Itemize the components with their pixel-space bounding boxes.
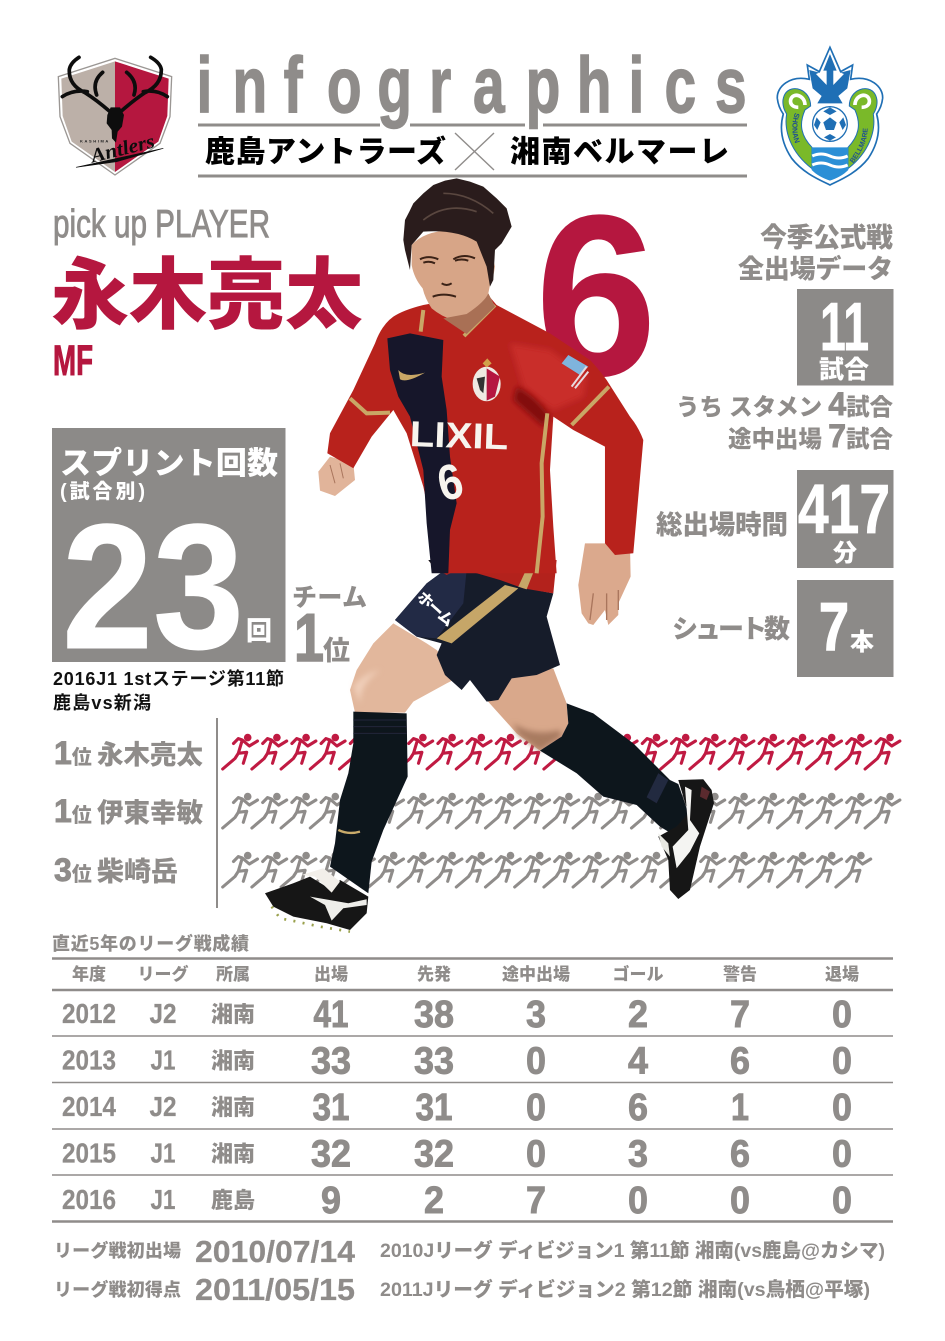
table header: 退場 xyxy=(825,965,859,984)
panel: sprint count: (試合別) xyxy=(60,480,145,503)
row 2012: J2 xyxy=(150,998,176,1029)
sleeve patch xyxy=(562,355,588,375)
squad number: 6 xyxy=(535,167,657,424)
table header: 途中出場 xyxy=(502,964,570,984)
first league appearance: 2010Jリーグ ディビジョン1 第11節 湘南(vs鹿島@カシマ) xyxy=(380,1239,885,1262)
ranking labels: 1位 xyxy=(54,735,92,771)
row 2014 xyxy=(62,1087,852,1129)
row 2014: 湘南 xyxy=(211,1095,255,1120)
trident xyxy=(809,54,851,103)
panel: sprint count: スプリント回数 xyxy=(60,446,278,481)
right hand xyxy=(578,543,631,625)
shorts xyxy=(395,565,560,702)
row 2015: J1 xyxy=(150,1138,176,1168)
ranking labels: 3位 xyxy=(54,852,92,888)
heading: season appearances data xyxy=(738,222,893,284)
jersey black panel xyxy=(387,333,457,573)
back sock xyxy=(540,703,688,837)
stat box: 11 matches: 試合 xyxy=(819,356,869,384)
row 2013: 湘南 xyxy=(211,1048,255,1074)
ranking labels: 永木亮太 xyxy=(97,740,203,770)
team rank: チーム xyxy=(292,584,367,612)
text: starts and substitute appearances: 途中出場 7試合 xyxy=(728,418,894,454)
ranking labels: 1位 xyxy=(54,793,92,829)
table heading: 直近5年のリーグ戦成績 xyxy=(52,933,249,954)
big number 23: 23 xyxy=(62,487,244,686)
stat: shots: シュート数 xyxy=(672,614,790,644)
pictogram row: 柴崎岳 sprints xyxy=(223,852,871,887)
row 2015: 2015 xyxy=(62,1138,116,1168)
row 2014: 6 xyxy=(628,1087,648,1129)
row 2014: 2014 xyxy=(62,1091,116,1122)
first league appearance xyxy=(54,1234,885,1269)
team rank xyxy=(292,584,367,676)
row 2015: 0 xyxy=(526,1134,546,1176)
ranking labels: 伊東幸敏 xyxy=(97,798,203,828)
row 2013: J1 xyxy=(150,1044,176,1076)
row 2013: 0 xyxy=(832,1040,852,1082)
row 2013: 0 xyxy=(526,1040,546,1082)
crest: Shonan Bellmare xyxy=(776,45,884,186)
back boot xyxy=(658,779,714,899)
table header: ゴール xyxy=(612,964,664,984)
jersey gold stripes xyxy=(350,305,609,573)
shorts text: ホーム xyxy=(413,589,457,630)
stat box: 417 minutes: 分 xyxy=(833,540,857,567)
title: infographics: infographics xyxy=(197,41,747,129)
jersey xyxy=(327,293,643,573)
text: BELLMARE: BELLMARE xyxy=(850,128,868,163)
stat box: 11 matches: 11 xyxy=(820,289,869,365)
football xyxy=(813,107,847,141)
table header: 先発 xyxy=(417,964,451,984)
neck and face xyxy=(412,230,495,334)
stat box: 417 minutes: 417 xyxy=(798,470,890,548)
row 2013: 2013 xyxy=(62,1044,116,1076)
ranking labels: 柴崎岳 xyxy=(97,857,178,887)
ranking axis xyxy=(216,718,218,908)
player legs xyxy=(265,543,714,932)
row 2014: 0 xyxy=(832,1087,852,1129)
first league goal xyxy=(54,1272,870,1307)
row 2014: J2 xyxy=(150,1091,176,1122)
row 2012: 2 xyxy=(628,994,648,1036)
text: Antlers script: Antlers xyxy=(86,130,157,168)
hair xyxy=(403,178,512,287)
green band right xyxy=(848,89,877,169)
row 2012 xyxy=(62,994,852,1036)
team rank: 1 xyxy=(294,600,324,676)
text: starts and substitute appearances xyxy=(676,386,894,454)
pictogram row: 永木亮太 23 sprints xyxy=(223,734,900,769)
row 2013: 4 xyxy=(628,1040,648,1082)
shirt number: 6 xyxy=(432,452,469,512)
row 2015: 湘南 xyxy=(211,1142,255,1166)
stat box: 7 shots: 7 xyxy=(819,589,849,665)
header rule lines xyxy=(198,124,747,178)
row 2016: 0 xyxy=(628,1180,648,1222)
row 2015: 32 xyxy=(414,1134,454,1176)
row 2016: 9 xyxy=(321,1180,341,1222)
first league goal: リーグ戦初得点 xyxy=(54,1279,181,1300)
row 2016: 0 xyxy=(730,1180,750,1222)
pictogram row: 伊東幸敏 23 sprints xyxy=(223,793,900,828)
row 2016 xyxy=(62,1180,852,1222)
stat box: 7 shots xyxy=(797,580,894,677)
match note: 2016J1 1stステージ第11節 xyxy=(53,668,284,689)
first league appearance: リーグ戦初出場 xyxy=(54,1240,181,1261)
first league appearance: 2010/07/14 xyxy=(195,1234,356,1269)
row 2016: 0 xyxy=(832,1180,852,1222)
row 2015: 6 xyxy=(730,1134,750,1176)
icon: versus cross xyxy=(455,133,494,170)
row 2016: 2 xyxy=(424,1180,444,1222)
row 2016: 7 xyxy=(526,1180,546,1222)
row 2014: 31 xyxy=(416,1087,452,1129)
heading: season appearances data: 全出場データ xyxy=(738,254,893,284)
row 2012: 7 xyxy=(730,994,750,1036)
ranking labels xyxy=(54,735,203,888)
first league goal: 2011/05/15 xyxy=(195,1272,355,1307)
text: SHONAN: SHONAN xyxy=(792,113,800,144)
player name: 永木亮太 xyxy=(51,251,363,339)
row 2012: 0 xyxy=(832,994,852,1036)
row 2014: 1 xyxy=(731,1087,749,1129)
player position: MF xyxy=(53,337,93,385)
front sock xyxy=(330,712,408,893)
stat box: 417 minutes xyxy=(797,470,894,568)
left fist xyxy=(318,457,355,496)
row 2015: 3 xyxy=(628,1134,648,1176)
text: KASHIMA: KASHIMA xyxy=(80,139,108,144)
stat: total minutes xyxy=(656,470,894,568)
row 2012: 38 xyxy=(414,994,454,1036)
row 2012: 41 xyxy=(314,994,348,1036)
player photo illustration xyxy=(265,178,714,932)
match heading: Kashima vs Shonan xyxy=(205,133,729,170)
match note xyxy=(53,668,284,713)
row 2016: 鹿島 xyxy=(211,1188,255,1213)
player upper body xyxy=(318,178,643,573)
row 2013: 33 xyxy=(311,1040,351,1082)
row 2012: 3 xyxy=(526,994,546,1036)
facial features xyxy=(420,256,475,297)
swoosh xyxy=(398,370,425,380)
panel: sprint count xyxy=(52,428,286,686)
crest badge xyxy=(473,367,501,401)
shorts gold stripe xyxy=(437,585,518,643)
table lines xyxy=(52,958,893,1222)
row 2013 xyxy=(62,1040,852,1082)
table header: 年度 xyxy=(72,964,106,984)
match heading: Kashima vs Shonan: 鹿島アントラーズ xyxy=(205,135,446,169)
text: starts and substitute appearances: うち スタメン 4試合 xyxy=(676,386,894,422)
table header: リーグ xyxy=(138,964,188,984)
row 2016: 2016 xyxy=(62,1184,116,1215)
back leg skin xyxy=(487,668,568,751)
first league goal: 2011Jリーグ ディビジョン2 第12節 湘南(vs鳥栖@平塚) xyxy=(380,1278,870,1301)
shirt hem xyxy=(428,560,557,593)
sponsor text LIXIL: LIXIL xyxy=(409,413,509,457)
waves xyxy=(812,147,848,181)
label: pick up PLAYER: pick up PLAYER xyxy=(53,203,270,246)
stat: shots xyxy=(672,580,894,677)
row 2012: 湘南 xyxy=(211,1002,255,1027)
match heading: Kashima vs Shonan: 湘南ベルマーレ xyxy=(510,136,729,169)
table: league record xyxy=(52,958,893,1222)
table header: 警告 xyxy=(723,964,757,984)
row 2012: 2012 xyxy=(62,998,116,1029)
row 2014: 31 xyxy=(312,1087,350,1129)
row 2016: J1 xyxy=(150,1184,176,1215)
stat box: 7 shots: 本 xyxy=(850,629,874,656)
row 2015: 0 xyxy=(832,1134,852,1176)
panel: sprint count: 回 xyxy=(246,616,272,646)
front boot xyxy=(265,877,368,930)
front thigh skin xyxy=(350,623,460,713)
table header: 所属 xyxy=(216,965,250,984)
row 2013: 6 xyxy=(730,1040,750,1082)
row 2015 xyxy=(62,1134,852,1176)
table header: 出場 xyxy=(314,965,348,984)
stat box: 11 matches xyxy=(797,289,894,386)
heading: season appearances data: 今季公式戦 xyxy=(760,222,893,253)
team rank: 位 xyxy=(323,636,350,666)
jersey shading xyxy=(510,343,587,410)
stat: total minutes: 総出場時間 xyxy=(656,510,788,540)
table header xyxy=(72,964,859,984)
green band left xyxy=(783,89,812,169)
row 2015: 32 xyxy=(311,1134,351,1176)
match note: 鹿島vs新潟 xyxy=(53,692,151,713)
crest: Kashima Antlers xyxy=(58,57,172,175)
row 2013: 33 xyxy=(414,1040,454,1082)
row 2014: 0 xyxy=(526,1087,546,1129)
